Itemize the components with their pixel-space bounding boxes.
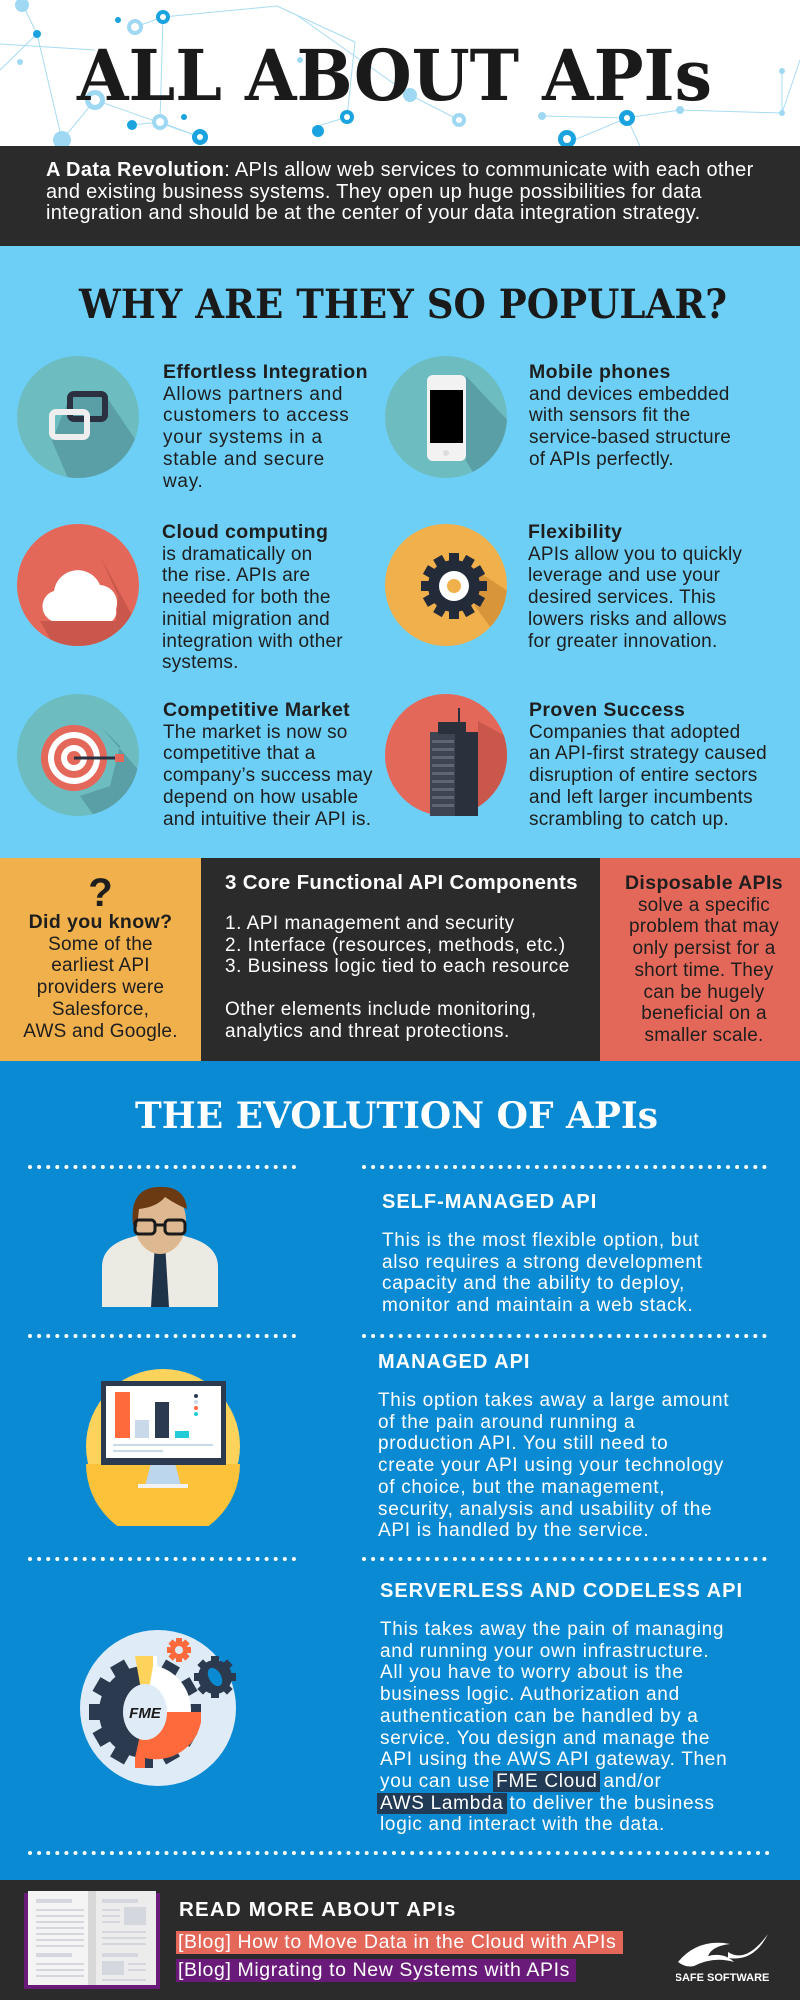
text: serverless api: logic and interact with the data. bbox=[380, 1814, 665, 1835]
icon: target bbox=[17, 694, 139, 816]
text: cloud computing: systems. bbox=[162, 652, 239, 673]
other elements text: analytics and threat protections. bbox=[225, 1021, 510, 1042]
text: serverless api: All you have to worry about is the bbox=[380, 1662, 684, 1683]
disposable text bbox=[625, 872, 783, 1046]
text: proven success bbox=[529, 699, 767, 830]
text: serverless api: authentication can be handled by a bbox=[380, 1706, 699, 1727]
text: managed api: create your API using your technology bbox=[378, 1455, 724, 1476]
other elements text bbox=[225, 999, 537, 1042]
disposable text: smaller scale. bbox=[645, 1025, 763, 1046]
panel: why popular bbox=[0, 246, 800, 858]
intro text: and existing business systems. They open up huge possibilities for data bbox=[46, 181, 702, 203]
text: effortless integration: Allows partners and bbox=[163, 384, 343, 405]
icon: monitor dashboard bbox=[86, 1369, 240, 1526]
text: proven success: and left larger incumbents bbox=[529, 787, 753, 808]
text: cloud computing: is dramatically on bbox=[162, 544, 312, 565]
text: effortless integration: stable and secure bbox=[163, 449, 325, 470]
did you know text: Did you know? bbox=[29, 911, 172, 933]
icon: chain link bbox=[17, 356, 139, 478]
text: managed api: MANAGED API bbox=[378, 1351, 530, 1373]
icon: mobile phone bbox=[385, 356, 507, 478]
text: competitive market bbox=[163, 699, 373, 830]
core components list: 1. API management and security bbox=[225, 913, 515, 934]
text: self-managed api bbox=[382, 1191, 703, 1316]
did you know text: Salesforce, bbox=[52, 999, 149, 1020]
footer bbox=[0, 1880, 800, 2000]
did you know text: earliest API bbox=[51, 955, 150, 976]
text: serverless api: business logic. Authorization and bbox=[380, 1684, 680, 1705]
heading: read more: READ MORE ABOUT APIs bbox=[179, 1898, 457, 1921]
did you know text: providers were bbox=[37, 977, 164, 998]
text: cloud computing: needed for both the bbox=[162, 587, 331, 608]
text: managed api: API is handled by the service. bbox=[378, 1520, 649, 1541]
text: cloud computing: Cloud computing bbox=[162, 521, 328, 543]
text: effortless integration: Effortless Integration bbox=[163, 361, 368, 383]
core components list: 3. Business logic tied to each resource bbox=[225, 956, 570, 977]
text: proven success: an API-first strategy caused bbox=[529, 743, 767, 764]
icon: gear bbox=[385, 524, 507, 646]
disposable text: beneficial on a bbox=[641, 1003, 767, 1024]
text: competitive market: The market is now so bbox=[163, 722, 348, 743]
text: self-managed api: SELF-MANAGED API bbox=[382, 1191, 597, 1213]
text: serverless api: service. You design and manage the bbox=[380, 1728, 710, 1749]
text: effortless integration: your systems in a bbox=[163, 427, 323, 448]
text: mobile phones: Mobile phones bbox=[529, 361, 671, 383]
text: self-managed api: capacity and the ability to deploy, bbox=[382, 1273, 685, 1294]
did you know text: Some of the bbox=[48, 934, 153, 955]
text: competitive market: and intuitive their API is. bbox=[163, 809, 371, 830]
text: serverless api: This takes away the pain of managing bbox=[380, 1619, 724, 1640]
text: managed api: This option takes away a large amount bbox=[378, 1390, 729, 1411]
popular icons bbox=[17, 356, 507, 816]
text: serverless api: AWS Lambda to deliver the business bbox=[380, 1793, 715, 1814]
disposable text: can be hugely bbox=[644, 982, 764, 1003]
title: ALL ABOUT APIs bbox=[76, 34, 712, 117]
disposable text: short time. They bbox=[634, 960, 774, 981]
heading: evolution of apis: THE EVOLUTION OF APIs bbox=[135, 1095, 658, 1137]
text: proven success: disruption of entire sectors bbox=[529, 765, 757, 786]
other elements text: Other elements include monitoring, bbox=[225, 999, 537, 1020]
disposable text: problem that may bbox=[629, 916, 779, 937]
text: flexibility: for greater innovation. bbox=[528, 631, 717, 652]
logo: safe software bbox=[676, 1934, 769, 1984]
text: flexibility: leverage and use your bbox=[528, 565, 720, 586]
panel: disposable apis bbox=[600, 858, 800, 1061]
text: managed api: security, analysis and usability of the bbox=[378, 1499, 712, 1520]
text: managed api bbox=[378, 1351, 729, 1541]
text: mobile phones: of APIs perfectly. bbox=[529, 449, 674, 470]
intro text: integration and should be at the center of your data integration strategy. bbox=[46, 202, 700, 224]
text: cloud computing: integration with other bbox=[162, 631, 343, 652]
intro text bbox=[46, 159, 754, 224]
text: serverless api bbox=[377, 1580, 743, 1835]
disposable text: only persist for a bbox=[632, 938, 776, 959]
icon: skyscraper bbox=[385, 694, 507, 816]
text: mobile phones: with sensors fit the bbox=[529, 405, 690, 426]
text: cloud computing: the rise. APIs are bbox=[162, 565, 310, 586]
text: managed api: of choice, but the management, bbox=[378, 1477, 665, 1498]
text: managed api: of the pain around running a bbox=[378, 1412, 635, 1433]
text: cloud computing bbox=[162, 521, 343, 673]
text: mobile phones: and devices embedded bbox=[529, 384, 729, 405]
disposable text: Disposable APIs bbox=[625, 872, 783, 894]
text: proven success: Companies that adopted bbox=[529, 722, 740, 743]
did you know text bbox=[23, 911, 178, 1042]
dotted separators bbox=[28, 1165, 770, 1855]
logo: safe software: SAFE SOFTWARE bbox=[676, 1972, 769, 1984]
text: effortless integration: way. bbox=[163, 471, 203, 492]
core components list bbox=[225, 913, 570, 977]
text: effortless integration: customers to access bbox=[163, 405, 349, 426]
icon: open book bbox=[24, 1891, 160, 1989]
core components heading: 3 Core Functional API Components bbox=[225, 871, 578, 894]
disposable text: solve a specific bbox=[638, 895, 770, 916]
text: flexibility: Flexibility bbox=[528, 521, 622, 543]
icon: question mark: ? bbox=[88, 871, 113, 915]
intro text: A Data Revolution: APIs allow web services to communicate with each other bbox=[46, 159, 754, 181]
did you know text: AWS and Google. bbox=[23, 1021, 178, 1042]
icon: serverless gears bbox=[80, 1630, 236, 1786]
panel: evolution bbox=[0, 1061, 800, 1880]
text: flexibility: APIs allow you to quickly bbox=[528, 544, 742, 565]
intro band bbox=[0, 146, 800, 246]
text: managed api: production API. You still need to bbox=[378, 1433, 668, 1454]
text: proven success: Proven Success bbox=[529, 699, 685, 721]
link: blog migrating: [Blog] Migrating to New Systems with APIs bbox=[178, 1959, 570, 1981]
icon: cloud bbox=[17, 524, 139, 646]
text: competitive market: Competitive Market bbox=[163, 699, 350, 721]
text: flexibility: lowers risks and allows bbox=[528, 609, 727, 630]
icon: developer man bbox=[102, 1186, 218, 1307]
header network background bbox=[0, 0, 800, 146]
text: cloud computing: initial migration and bbox=[162, 609, 330, 630]
panel: did you know bbox=[0, 858, 201, 1061]
heading: why are they so popular: WHY ARE THEY SO POPULAR? bbox=[78, 281, 727, 328]
text: competitive market: depend on how usable bbox=[163, 787, 358, 808]
core components list: 2. Interface (resources, methods, etc.) bbox=[225, 935, 566, 956]
text: serverless api: SERVERLESS AND CODELESS API bbox=[380, 1580, 743, 1602]
text: competitive market: competitive that a bbox=[163, 743, 316, 764]
text: self-managed api: This is the most flexible option, but bbox=[382, 1230, 699, 1251]
panel: core components bbox=[201, 858, 600, 1061]
text: self-managed api: monitor and maintain a web stack. bbox=[382, 1295, 693, 1316]
text: serverless api: API using the AWS API gateway. Then bbox=[380, 1749, 727, 1770]
text: serverless api: and running your own infrastructure. bbox=[380, 1641, 709, 1662]
text: competitive market: company’s success may bbox=[163, 765, 373, 786]
text: flexibility: desired services. This bbox=[528, 587, 716, 608]
text: mobile phones: service-based structure bbox=[529, 427, 731, 448]
text: proven success: scrambling to catch up. bbox=[529, 809, 729, 830]
text: effortless integration bbox=[163, 361, 368, 492]
text: flexibility bbox=[528, 521, 742, 652]
link: blog cloud: [Blog] How to Move Data in the Cloud with APIs bbox=[178, 1931, 616, 1953]
icon: serverless gears: FME bbox=[129, 1705, 162, 1722]
text: self-managed api: also requires a strong development bbox=[382, 1252, 703, 1273]
text: serverless api: you can use FME Cloud and/or bbox=[380, 1771, 662, 1792]
text: mobile phones bbox=[529, 361, 731, 470]
